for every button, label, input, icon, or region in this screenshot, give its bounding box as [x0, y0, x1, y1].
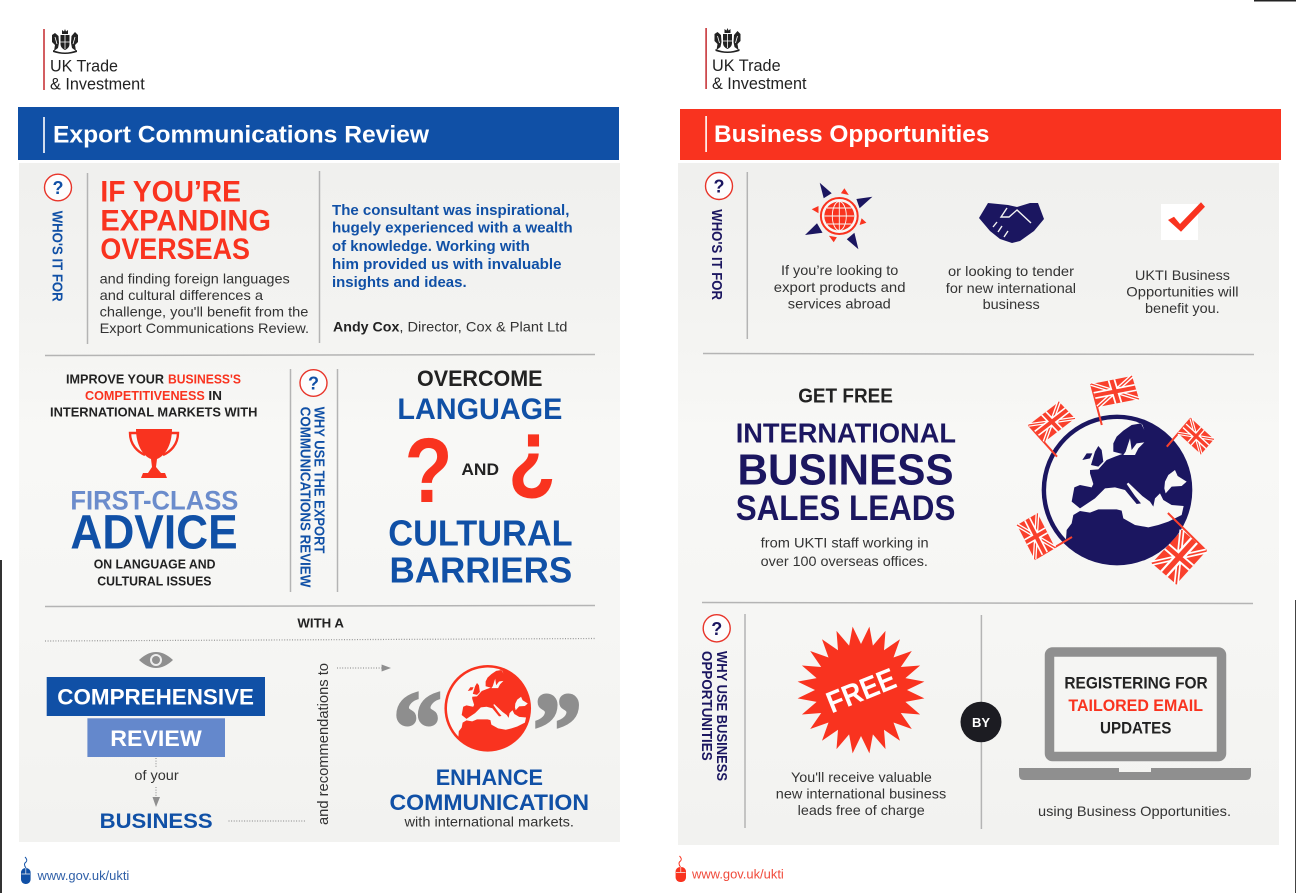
text block: benefit: Opportunities will	[1126, 284, 1238, 300]
section: comprehensive review: BUSINESS	[100, 809, 213, 833]
icon: laptop with registering text: TAILORED EMAIL	[1068, 696, 1203, 715]
icon: red question mark: ?	[404, 420, 452, 522]
flag: right	[1178, 418, 1214, 454]
icon: navy globe with union flags	[1017, 376, 1214, 584]
icon: laptop with registering text: UPDATES	[1100, 719, 1171, 738]
logo: UK Trade & Investment (left)	[43, 29, 145, 93]
quote: testimonial	[332, 203, 573, 291]
header: Export Communications Review: Export Communications Review	[53, 122, 429, 148]
icon: trophy	[130, 429, 178, 478]
section: first-class advice: INTERNATIONAL MARKETS WITH	[50, 405, 257, 420]
heading: if you're expanding overseas	[100, 176, 271, 266]
icon: question mark circle: ?	[714, 176, 724, 196]
icon: laptop with registering text: REGISTERING FOR	[1064, 673, 1208, 692]
quote: testimonial: of knowledge. Working with	[332, 239, 530, 255]
badge: by	[960, 702, 1002, 742]
section: overcome barriers: OVERCOME	[417, 366, 542, 391]
text block: tender: for new international	[946, 280, 1076, 296]
icon: royal crest	[714, 28, 740, 53]
header: Business Opportunities: Business Opportunities	[714, 121, 989, 148]
heading: if you're expanding overseas: EXPANDING	[100, 204, 271, 237]
globe	[1042, 415, 1192, 565]
icon: question mark circle: ?	[711, 619, 722, 639]
icon: grey quote marks	[393, 669, 582, 788]
section label: why use business opportunities: OPPORTUNITIES	[698, 651, 715, 761]
header: Business Opportunities	[680, 109, 1281, 160]
section: first-class advice: FIRST-CLASS	[70, 485, 238, 515]
icon: royal crest	[52, 29, 78, 54]
section: comprehensive review: and recommendations to	[316, 663, 332, 825]
icon: free starburst: FREE	[822, 662, 901, 720]
flag: upper left	[1029, 402, 1075, 442]
icon: handshake	[979, 203, 1044, 243]
section label: why use the export communications review: COMMUNICATIONS REVIEW	[296, 407, 314, 588]
section label: why use business opportunities	[698, 615, 730, 781]
attribution: Andy Cox	[333, 319, 400, 335]
text block: free leads: new international business	[776, 786, 946, 802]
section: sales leads heading	[736, 385, 956, 569]
arrow: right	[337, 664, 391, 672]
text block: intro: and finding foreign languages	[100, 270, 290, 286]
section: who's it for (left): WHO'S IT FOR	[48, 211, 65, 302]
section: sales leads heading: from UKTI staff working in	[761, 535, 929, 551]
text block: intro: challenge, you'll benefit from the	[100, 304, 309, 320]
icon: question mark circle	[706, 172, 732, 200]
icon: check mark	[1161, 202, 1205, 240]
section: overcome barriers: LANGUAGE	[397, 393, 562, 426]
icon: question mark circle: ?	[308, 374, 319, 394]
quote: testimonial: hugely experienced with a wealth	[332, 221, 573, 237]
icon: question mark circle	[300, 370, 327, 396]
icon: laptop with registering text	[1019, 652, 1251, 780]
box: review: REVIEW	[110, 726, 202, 751]
logo: UK Trade & Investment (left): & Investment	[50, 75, 145, 93]
header: Export Communications Review	[18, 107, 619, 160]
footer: website link (left): www.gov.uk/ukti	[36, 869, 129, 883]
section label: why use the export communications review: WHY USE THE EXPORT	[310, 407, 328, 553]
box: comprehensive: COMPREHENSIVE	[57, 684, 254, 709]
box: review	[87, 718, 225, 757]
icon: question mark circle: ?	[52, 178, 64, 198]
text block: free leads: leads free of charge	[798, 802, 925, 818]
logo: UK Trade & Investment (right): UK Trade	[712, 57, 781, 75]
logo: UK Trade & Investment (right)	[705, 28, 807, 93]
section: enhance communication: ENHANCE	[436, 765, 543, 790]
section: enhance communication	[390, 665, 589, 830]
box: comprehensive	[47, 677, 265, 716]
section: who's it for (right)	[706, 172, 1238, 339]
section: who's it for (left)	[44, 171, 573, 344]
section: first-class advice: IN	[208, 388, 222, 403]
section: enhance communication: with international markets.	[403, 814, 574, 830]
text block: export products: If you’re looking to	[781, 262, 899, 278]
text block: tender: business	[983, 296, 1040, 312]
heading: if you're expanding overseas: OVERSEAS	[100, 233, 250, 266]
text block: intro: and cultural differences a	[100, 287, 263, 303]
logo: UK Trade & Investment (right): & Investment	[712, 75, 807, 93]
section: first-class advice: ADVICE	[70, 506, 238, 559]
quote: testimonial: insights and ideas.	[332, 275, 467, 291]
icon: red globe	[444, 665, 531, 752]
icon: mouse	[21, 857, 31, 884]
section: overcome barriers	[388, 366, 573, 591]
section: first-class advice: BUSINESS'S	[168, 371, 241, 386]
section: comprehensive review: of your	[134, 767, 179, 783]
section: overcome barriers: CULTURAL	[388, 513, 573, 554]
text block: free leads: You'll receive valuable	[791, 769, 932, 785]
section: sales leads heading: GET FREE	[798, 385, 893, 408]
flag: lower right	[1152, 530, 1206, 584]
section: first-class advice: COMPETITIVENESS	[85, 388, 205, 403]
text block: tender	[946, 263, 1076, 312]
text block: export products	[774, 262, 906, 312]
arrow: down	[152, 797, 160, 807]
attribution	[333, 318, 567, 335]
icon: mouse	[676, 856, 686, 882]
text block: tender: or looking to tender	[948, 263, 1074, 279]
flag: top	[1091, 376, 1139, 407]
icon: free starburst	[798, 627, 924, 753]
icon: question mark circle	[703, 615, 730, 642]
icon: eye	[139, 652, 173, 668]
icon: grey quote marks: ”	[533, 671, 582, 788]
text block: benefit: UKTI Business	[1135, 267, 1230, 283]
text: with a: WITH A	[297, 615, 345, 630]
quote: testimonial: The consultant was inspirational,	[332, 203, 569, 219]
section: first-class advice: IMPROVE YOUR	[66, 371, 165, 386]
section: who's it for (right): WHO'S IT FOR	[708, 209, 725, 300]
heading: if you're expanding overseas: IF YOU’RE	[100, 176, 241, 209]
text block: intro	[100, 270, 309, 336]
text: using business opportunities: using Business Opportunities.	[1038, 803, 1231, 819]
text block: benefit	[1126, 267, 1238, 316]
icon: compass globe	[805, 183, 872, 249]
text block: export products: services abroad	[788, 296, 891, 312]
logo: UK Trade & Investment (left): UK Trade	[50, 58, 118, 76]
section: sales leads heading: INTERNATIONAL	[736, 418, 956, 449]
section: overcome barriers: BARRIERS	[390, 550, 572, 591]
icon: grey quote marks: “	[393, 669, 442, 786]
section: enhance communication: COMMUNICATION	[390, 790, 589, 815]
section: comprehensive review	[47, 652, 391, 833]
flag: lower left	[1017, 513, 1055, 559]
section: first-class advice: ON LANGUAGE AND	[94, 556, 216, 571]
section: sales leads heading: over 100 overseas offices.	[761, 553, 928, 569]
icon: inverted red question mark: ¿	[508, 401, 556, 503]
panel: Export Communications Review content	[19, 163, 620, 842]
section: sales leads heading: BUSINESS	[738, 445, 954, 494]
text block: free leads	[776, 769, 946, 818]
quote: testimonial: him provided us with invaluable	[332, 257, 562, 273]
section: first-class advice	[50, 371, 257, 588]
text block: benefit: benefit you.	[1145, 300, 1220, 316]
section label: why use business opportunities: WHY USE BUSINESS	[713, 651, 730, 781]
badge: by: BY	[972, 715, 990, 730]
footer: website link (left)	[21, 857, 129, 884]
section: first-class advice: CULTURAL ISSUES	[97, 573, 212, 588]
footer: website link (right)	[676, 856, 784, 882]
text block: export products: export products and	[774, 279, 906, 295]
section: sales leads heading: SALES LEADS	[736, 489, 955, 528]
section: overcome barriers: AND	[461, 461, 499, 479]
icon: question mark circle	[44, 174, 72, 201]
footer: website link (right): www.gov.uk/ukti	[691, 868, 784, 882]
attribution: , Director, Cox & Plant Ltd	[399, 318, 567, 334]
panel: Business Opportunities content	[678, 163, 1279, 845]
text block: intro: Export Communications Review.	[100, 320, 309, 336]
section label: why use the export communications review	[290, 369, 338, 592]
